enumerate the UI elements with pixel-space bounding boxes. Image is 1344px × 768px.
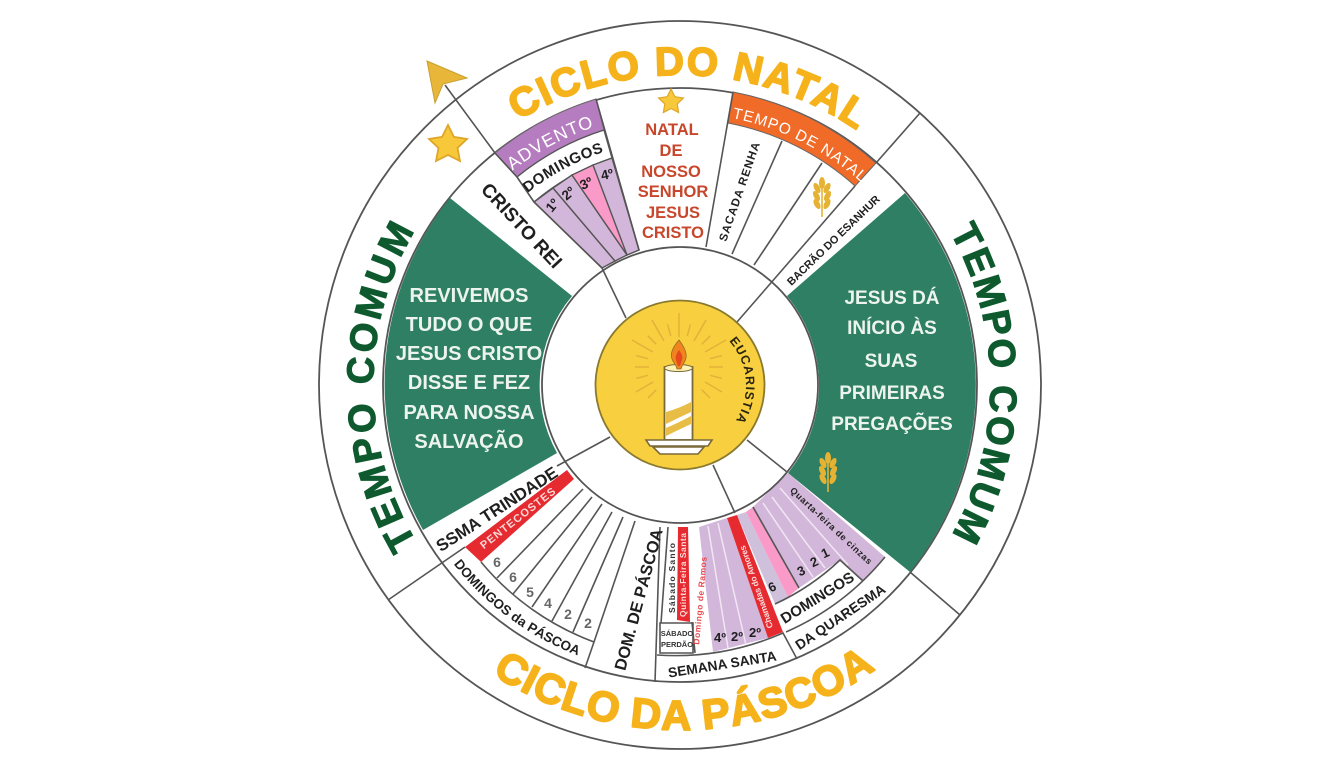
- text block: right green: PREGAÇÕES: [831, 413, 953, 435]
- text block: Easter Sunday numbers: 2: [584, 615, 592, 631]
- text block: Domingos Advento: DOMINGOS: [522, 143, 602, 192]
- text block: left green: SALVAÇÃO: [414, 430, 524, 453]
- panel: green sector left: [385, 198, 572, 530]
- text block: Pentecostes: PENTECOSTES: [478, 486, 558, 552]
- text block: Easter Sunday numbers: 2: [564, 606, 572, 622]
- text block: left green: TUDO O QUE: [406, 314, 532, 336]
- text block: Natal de Nosso Senhor: JESUS: [646, 204, 700, 222]
- text block: Holy Week columns: Chamadas do Amores: [737, 544, 775, 630]
- icon: wheat top: [811, 177, 833, 217]
- text block: Domingos Quaresma: DOMINGOS: [778, 569, 857, 627]
- text block: Lent numbers: 2: [808, 554, 821, 570]
- text block: Bacrão do Esanhur: BACRÃO DO ESANHUR: [784, 193, 883, 288]
- panel: Advento band: [495, 99, 639, 268]
- icon: candle: [646, 340, 712, 454]
- text block: Holy Week columns: SÁBADO: [661, 629, 693, 638]
- text block: Cristo Rei: CRISTO REI: [476, 179, 566, 273]
- panel: lower left red band: [465, 470, 574, 562]
- icon: star top: [659, 89, 683, 112]
- week 1: [534, 188, 615, 268]
- text block: left green: JESUS CRISTO: [396, 343, 542, 365]
- liturgical wheel: [319, 21, 1041, 749]
- heading: Tempo Comum right: TEMPO COMUM: [952, 219, 1018, 546]
- text block: Holy Week columns: [661, 533, 775, 649]
- text block: Advent weeks: 2º: [559, 184, 578, 203]
- text block: Natal de Nosso Senhor: SENHOR: [638, 183, 708, 201]
- text block: Semana Santa: SEMANA SANTA: [667, 649, 778, 681]
- text block: Domingos da Páscoa: DOMINGOS da PÁSCOA: [454, 558, 578, 656]
- text block: Lent numbers: 1: [819, 545, 832, 561]
- text block: right green: PRIMEIRAS: [839, 383, 945, 404]
- week 4: [593, 158, 639, 255]
- text block: Advent weeks: 1º: [543, 196, 562, 215]
- icon: star left: [429, 125, 467, 161]
- text block: Lent numbers: 6: [766, 579, 779, 595]
- text block: right green: SUAS: [865, 351, 917, 372]
- medallion circle: [596, 300, 764, 470]
- outer ring: [319, 21, 1041, 749]
- text block: Natal de Nosso Senhor: NATAL: [645, 121, 699, 139]
- text block: Ssma Trindade: SSMA TRINDADE: [433, 463, 561, 556]
- text block: Sacada Renha: SACADA RENHA: [718, 141, 763, 243]
- text block: Holy Week columns: Quinta-Feira Santa: [678, 533, 688, 617]
- icon: rays: [632, 313, 726, 398]
- text block: Tempo de Natal: TEMPO DE NATAL: [734, 108, 864, 182]
- text block: Quarta-feira de Cinzas: Quarta-feira de cinzas: [788, 485, 874, 566]
- inner ring: [383, 88, 977, 682]
- text block: Da Quaresma: DA QUARESMA: [792, 581, 888, 653]
- text block: Lent numbers: [714, 545, 832, 645]
- text block: left green: DISSE E FEZ: [408, 372, 530, 394]
- text block: Easter Sunday numbers: [493, 554, 592, 631]
- text block: Lent numbers: 3: [795, 563, 808, 579]
- text block: Easter Sunday numbers: 6: [509, 569, 517, 585]
- text block: Easter Sunday numbers: 4: [544, 595, 552, 611]
- text block: Natal de Nosso Senhor: [638, 121, 708, 242]
- text block: Easter Sunday numbers: 5: [526, 584, 534, 600]
- title: Ciclo da Páscoa: CICLO DA PÁSCOA: [497, 650, 876, 731]
- panel: Tempo de Natal band: [728, 92, 876, 186]
- text block: Holy Week columns: Sábado Santo: [667, 543, 677, 613]
- divider lines: [388, 85, 960, 682]
- text block: right green: JESUS DÁ: [844, 287, 940, 309]
- week 2: [553, 175, 627, 261]
- text block: Holy Week columns: PERDÃO: [661, 640, 693, 649]
- text block: right green: INÍCIO ÀS: [847, 317, 937, 339]
- text block: left green: [396, 285, 542, 453]
- text block: Lent numbers: 4º: [714, 630, 726, 645]
- text block: Holy Week columns: Domingo de Ramos: [691, 556, 709, 645]
- text block: Eucaristia: EUCARISTIA: [730, 336, 755, 422]
- text block: Easter Sunday numbers: 6: [493, 554, 501, 570]
- text block: left green: PARA NOSSA: [403, 402, 535, 424]
- title: Ciclo do Natal: CICLO DO NATAL: [509, 46, 860, 130]
- icon: wheat bottom: [817, 452, 839, 492]
- panel: green sector right: [787, 193, 976, 572]
- text block: right green: [831, 287, 953, 435]
- heading: Tempo Comum left: TEMPO COMUM: [346, 220, 414, 556]
- text block: Lent numbers: 2º: [749, 625, 761, 640]
- panel: lower purple columns: [677, 473, 885, 652]
- text block: Natal de Nosso Senhor: DE: [660, 142, 682, 160]
- text block: Lent numbers: 2º: [731, 629, 743, 644]
- Domingos row: [517, 130, 612, 202]
- text block: Advento: ADVENTO: [509, 117, 592, 171]
- arrow: [427, 61, 467, 103]
- text block: Dom. de Páscoa: DOM. DE PÁSCOA: [611, 527, 667, 672]
- week 3: [572, 165, 639, 255]
- text block: Advent weeks: 4º: [599, 166, 615, 183]
- text block: Advent weeks: 3º: [577, 174, 595, 193]
- text block: left green: REVIVEMOS: [410, 285, 528, 307]
- text block: Advent weeks: [543, 166, 615, 215]
- panel: central medallion: [594, 300, 766, 470]
- center ring: [542, 247, 818, 523]
- text block: Natal de Nosso Senhor: NOSSO: [641, 163, 701, 181]
- text block: Natal de Nosso Senhor: CRISTO: [642, 224, 704, 242]
